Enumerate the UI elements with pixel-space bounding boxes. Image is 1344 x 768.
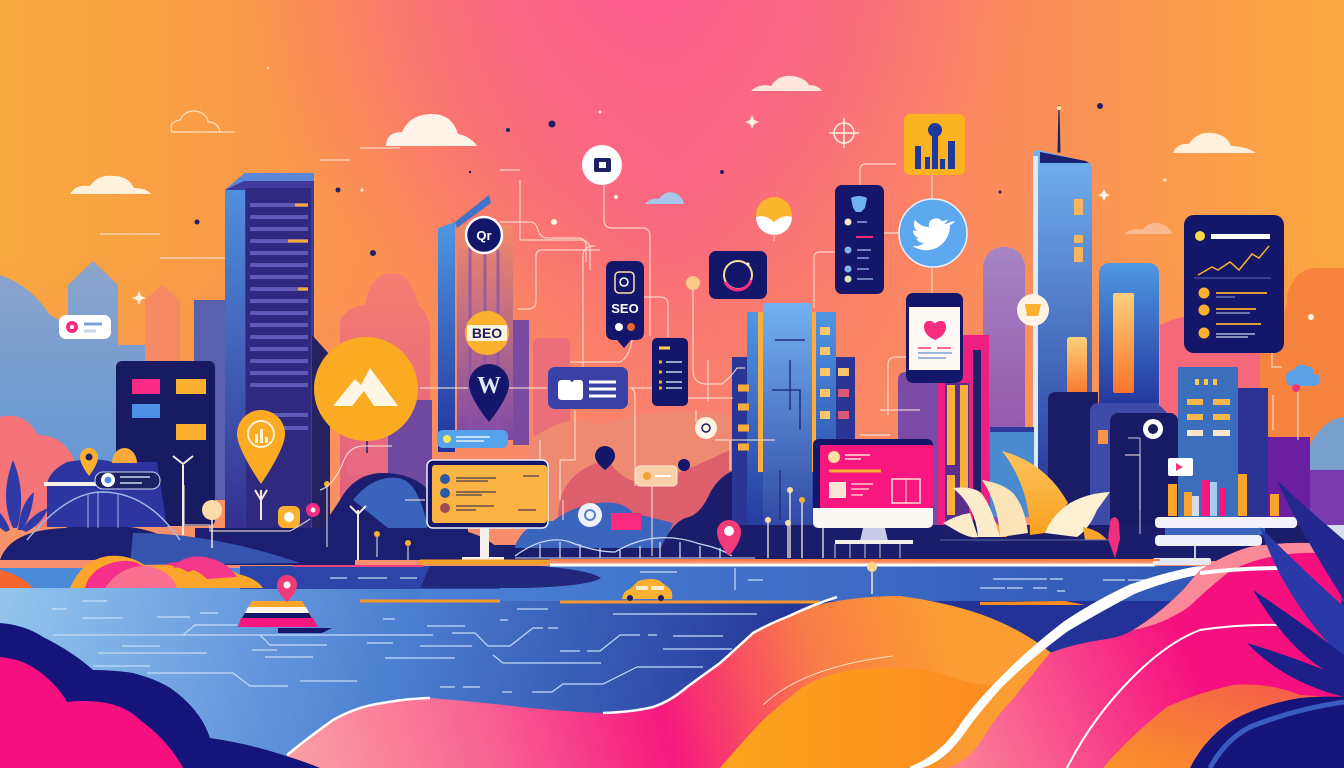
panel: tall app card — [835, 185, 884, 294]
tower: left striped skyscraper — [225, 173, 330, 535]
pin: pink centre — [717, 520, 741, 556]
badge: QR circle: Qr — [476, 228, 492, 243]
card: checklist — [652, 338, 688, 406]
phone card: SEO — [606, 261, 644, 348]
desktop monitor — [813, 439, 933, 558]
badge: BEO circle: BEO — [472, 325, 502, 341]
icon: camera circle — [582, 145, 622, 185]
island with striped boat — [238, 575, 332, 633]
chat label above billboard — [437, 430, 508, 448]
plant left — [0, 460, 48, 532]
icon: crosshair — [829, 118, 859, 148]
distant hazy skyline — [0, 247, 1344, 540]
panel: chart dashboard — [1184, 215, 1284, 353]
left dark screen building — [116, 361, 215, 526]
ground band under skyline — [0, 471, 1344, 565]
badge: BEO circle — [465, 311, 509, 355]
lamp posts and small markers — [173, 456, 823, 560]
sparkles — [132, 67, 1314, 320]
icon: half sun circle — [756, 197, 792, 241]
tower: tall right skyscraper with spire — [1033, 105, 1092, 536]
harbour water — [0, 560, 1344, 768]
icon: Twitter circle — [899, 199, 967, 267]
badge: QR circle — [466, 217, 502, 253]
foreground rolling hills — [287, 543, 1344, 768]
pin: WordPress: W — [477, 373, 501, 399]
icon: mountain circle — [314, 337, 418, 453]
pin: WordPress — [469, 364, 509, 422]
small circle badges — [578, 276, 1320, 530]
Sydney Opera House — [940, 438, 1140, 558]
connector lines network — [100, 148, 1298, 556]
palm leaves right — [1247, 480, 1344, 697]
dark foreground buildings right — [990, 367, 1344, 553]
bridge — [515, 538, 755, 558]
dark foreground bush left — [0, 623, 320, 768]
clouds — [70, 76, 1256, 234]
panel: tablet with heart — [906, 293, 963, 383]
phone card: SEO: SEO — [611, 301, 639, 316]
tag: left small label — [59, 315, 111, 339]
icon: analytics tile — [904, 114, 965, 175]
tower: right block with amber panel — [1099, 263, 1159, 413]
bar chart on platform right — [1153, 474, 1344, 565]
small yellow pin left — [80, 448, 98, 476]
tower: centre cluster — [732, 303, 855, 548]
card: blue profile — [548, 367, 628, 409]
small marker post on water — [871, 572, 873, 594]
card: ring icon — [709, 251, 767, 299]
dome bridge group left — [27, 448, 180, 540]
tower: pink-edged building — [898, 335, 989, 532]
pink shore bushes — [0, 556, 263, 588]
taxi car — [622, 579, 672, 601]
billboard panel — [427, 460, 548, 560]
icon: analytics location pin — [237, 410, 285, 520]
tower: centre-left with app badge — [438, 195, 529, 452]
